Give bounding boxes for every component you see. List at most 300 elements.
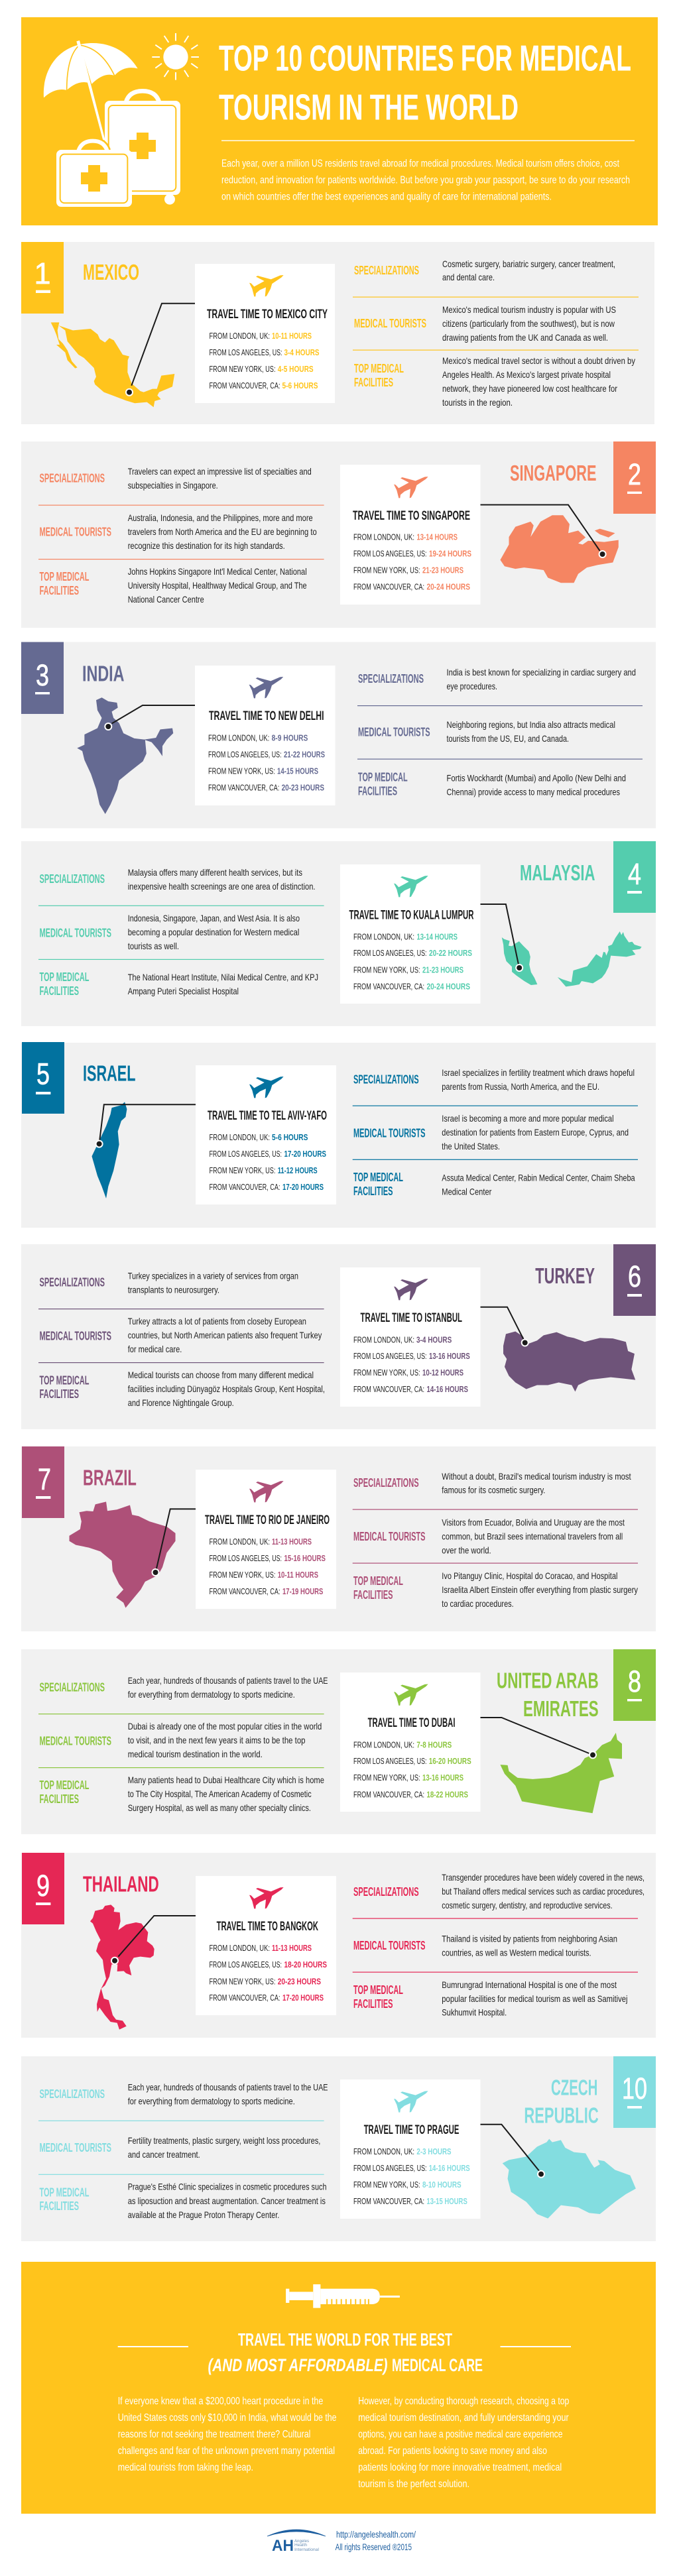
travel times: 13-14 HOURS xyxy=(416,532,458,542)
travel times: 14-15 HOURS xyxy=(277,766,318,776)
number badge 8: 8 xyxy=(628,1665,641,1698)
details text: Medical Center xyxy=(442,1187,492,1197)
travel times: 14-16 HOURS xyxy=(429,2163,470,2173)
country name: EMIRATES xyxy=(523,1696,599,1721)
travel time card xyxy=(196,1470,336,1609)
details text: Each year, hundreds of thousands of patients travel to the UAE xyxy=(128,2082,328,2093)
map: Czech Republic xyxy=(503,2139,636,2219)
row labels xyxy=(38,872,324,998)
details text xyxy=(442,1471,638,1609)
footer text: left column: reasons for not seeking the treatment there? Cultural xyxy=(118,2429,310,2440)
travel times: FROM LONDON, UK: xyxy=(210,1132,270,1142)
travel times: FROM NEW YORK, US: xyxy=(210,364,276,374)
number badge 8 xyxy=(613,1649,656,1721)
row labels: FACILITIES xyxy=(40,1792,79,1806)
travel times: 21-22 HOURS xyxy=(284,749,325,759)
details text: and Florence Nightingale Group. xyxy=(128,1397,234,1408)
connector and city marker xyxy=(95,1104,196,1148)
details text: to The City Hospital, The American Academy of Cosmetic xyxy=(128,1788,312,1799)
panel: 3 India xyxy=(21,642,656,829)
row labels xyxy=(353,264,639,389)
details text xyxy=(442,1067,635,1197)
details text: Without a doubt, Brazil's medical tourism industry is most xyxy=(442,1471,631,1482)
footer text: right column: However, by conducting thorough research, choosing a top xyxy=(358,2396,569,2407)
details text: and dental care. xyxy=(442,272,495,282)
travel times xyxy=(208,732,325,793)
details text: India is best known for specializing in cardiac surgery and xyxy=(447,667,636,677)
details text: drawing patients from the UK and Canada as well. xyxy=(442,332,608,343)
details text: Medical tourists can choose from many different medical xyxy=(128,1370,314,1380)
travel times: 17-20 HOURS xyxy=(284,1149,326,1159)
travel times: 17-20 HOURS xyxy=(282,1993,324,2003)
card title: TRAVEL TIME TO SINGAPORE xyxy=(353,508,470,523)
country name: INDIA xyxy=(82,661,125,685)
travel times: 3-4 HOURS xyxy=(416,1335,452,1344)
icon: plane xyxy=(249,275,284,296)
country name: CZECH xyxy=(551,2076,597,2100)
credits: All rights Reserved ®2015 xyxy=(336,2542,412,2552)
details text: Mexico's medical tourism industry is popular with US xyxy=(442,304,616,315)
travel times: 13-14 HOURS xyxy=(416,931,458,941)
footer text: right column xyxy=(358,2396,569,2490)
travel times: FROM LOS ANGELES, US: xyxy=(353,2163,427,2173)
country name: UNITED ARAB xyxy=(497,1669,599,1693)
connector and city marker xyxy=(104,705,195,731)
details text: recognize this destination for its high standards. xyxy=(128,540,285,551)
icon: plane xyxy=(394,2091,428,2113)
details text: destination for patients from Eastern Europe, Cyprus, and xyxy=(442,1127,629,1138)
panel: 5 Israel xyxy=(21,1042,656,1228)
row labels xyxy=(38,471,324,597)
travel times: FROM LOS ANGELES, US: xyxy=(353,1351,427,1361)
row labels: MEDICAL TOURISTS xyxy=(358,725,430,738)
details text: Turkey specializes in a variety of services from organ xyxy=(128,1270,298,1281)
details text: Visitors from Ecuador, Bolivia and Uruguay are the most xyxy=(442,1517,625,1528)
row labels: SPECIALIZATIONS xyxy=(353,1073,419,1086)
travel times: FROM VANCOUVER, CA: xyxy=(210,1586,280,1596)
row labels: SPECIALIZATIONS xyxy=(353,1476,419,1490)
footer text: left column: challenges and fear of the unknown prevent many potential xyxy=(118,2445,335,2457)
icon: umbrella xyxy=(44,40,138,141)
icon: syringe xyxy=(286,2284,400,2308)
row labels: TOP MEDICAL xyxy=(40,2186,89,2199)
details text: for medical care. xyxy=(128,1344,182,1354)
title xyxy=(219,38,631,127)
travel times: FROM NEW YORK, US: xyxy=(353,2180,420,2190)
travel times: FROM VANCOUVER, CA: xyxy=(208,783,279,793)
travel times: 17-20 HOURS xyxy=(282,1182,324,1192)
map: Malaysia xyxy=(502,931,642,986)
footer text: left column: medical tourists from taking the leap. xyxy=(118,2462,253,2473)
details text: inexpensive health screenings are one area of distinction. xyxy=(128,881,315,892)
panel: 7 Brazil xyxy=(21,1446,656,1631)
travel times: FROM LOS ANGELES, US: xyxy=(210,347,282,357)
row labels xyxy=(353,1476,638,1602)
details text: Dubai is already one of the most popular cities in the world xyxy=(128,1721,322,1731)
map: Brazil xyxy=(70,1501,176,1608)
details text: Malaysia offers many different health services, but its xyxy=(128,867,302,878)
number badge 9: 9 xyxy=(36,1869,50,1903)
footer text: right column: medical tourism destination, and fully understanding your xyxy=(358,2412,569,2424)
map: UAE xyxy=(500,1733,622,1813)
card title: TRAVEL TIME TO NEW DELHI xyxy=(209,709,324,723)
travel times: FROM LOS ANGELES, US: xyxy=(210,1553,282,1563)
country name: REPUBLIC xyxy=(524,2103,599,2128)
country name xyxy=(524,2076,599,2128)
details text xyxy=(128,1675,328,1813)
row labels: FACILITIES xyxy=(358,785,397,798)
travel times xyxy=(210,1132,326,1192)
travel times xyxy=(353,2146,470,2206)
travel times: 8-10 HOURS xyxy=(422,2180,462,2190)
footer text: right column: options, you can have a positive medical care experience xyxy=(358,2429,563,2440)
footer heading: (AND MOST AFFORDABLE) xyxy=(208,2355,387,2375)
details text: Sukhumvit Hospital. xyxy=(442,2007,507,2018)
travel times xyxy=(353,532,471,592)
number badge 2: 2 xyxy=(628,457,641,491)
logo: Angeles Health International: International xyxy=(294,2548,319,2552)
card title: TRAVEL TIME TO MEXICO CITY xyxy=(207,307,328,322)
details text: common, but Brazil sees international travelers from all xyxy=(442,1531,623,1542)
details text: Many patients head to Dubai Healthcare City which is home xyxy=(128,1775,324,1785)
travel times: 10-11 HOURS xyxy=(278,1570,318,1580)
row labels: MEDICAL TOURISTS xyxy=(40,926,111,939)
card title: TRAVEL TIME TO DUBAI xyxy=(368,1716,455,1730)
map: Mexico xyxy=(51,322,174,407)
travel times: FROM VANCOUVER, CA: xyxy=(353,981,424,991)
travel times: 13-16 HOURS xyxy=(422,1773,463,1783)
number badge 10: 10 xyxy=(622,2072,647,2105)
row labels: TOP MEDICAL xyxy=(40,970,89,984)
row labels: MEDICAL TOURISTS xyxy=(353,1530,426,1543)
footer text: left column: United States costs only $10,000 in India, what would be the xyxy=(118,2412,337,2424)
travel times: 21-23 HOURS xyxy=(422,965,463,974)
details text: countries, but North American patients also frequent Turkey xyxy=(128,1330,322,1340)
connector and city marker xyxy=(125,304,195,396)
details text: Neighboring regions, but India also attracts medical xyxy=(447,719,615,730)
travel times: FROM LOS ANGELES, US: xyxy=(210,1960,282,1969)
details text: Bumrungrad International Hospital is one of the most xyxy=(442,1979,617,1990)
number badge 4: 4 xyxy=(628,857,641,891)
travel times: FROM LONDON, UK: xyxy=(210,1537,270,1547)
panel: 8 United Arab Emirates xyxy=(21,1649,656,1834)
details text: Fortis Wockhardt (Mumbai) and Apollo (New Delhi and xyxy=(447,773,626,784)
details text: Mexico's medical travel sector is without a doubt driven by xyxy=(442,355,635,366)
number badge 9 xyxy=(22,1853,64,1924)
travel times xyxy=(210,331,320,390)
logo: Angeles Health International xyxy=(267,2530,326,2555)
connector and city marker xyxy=(111,1916,196,1965)
row labels: TOP MEDICAL xyxy=(40,1374,89,1387)
travel times: 11-13 HOURS xyxy=(272,1537,312,1547)
connector and city marker xyxy=(480,2125,545,2178)
footer heading xyxy=(118,2329,571,2375)
number badge 3: 3 xyxy=(36,658,49,692)
travel times: FROM LONDON, UK: xyxy=(353,532,414,542)
row labels: SPECIALIZATIONS xyxy=(354,264,419,277)
row labels: MEDICAL TOURISTS xyxy=(40,2141,111,2154)
number badge 6: 6 xyxy=(628,1259,641,1293)
travel times: 2-3 HOURS xyxy=(416,2146,452,2156)
details text: National Cancer Centre xyxy=(128,594,204,605)
travel times: 21-23 HOURS xyxy=(422,565,463,575)
travel times: FROM VANCOUVER, CA: xyxy=(210,381,280,390)
row labels: MEDICAL TOURISTS xyxy=(40,1734,111,1747)
details text: Israel specializes in fertility treatment which draws hopeful xyxy=(442,1067,635,1078)
travel times: 20-24 HOURS xyxy=(427,582,470,592)
row labels: FACILITIES xyxy=(40,1387,79,1401)
number badge 1 xyxy=(21,242,64,314)
travel times: FROM NEW YORK, US: xyxy=(210,1570,275,1580)
travel times: 7-8 HOURS xyxy=(416,1739,452,1749)
map: India xyxy=(77,697,173,814)
details text: Israel is becoming a more and more popular medical xyxy=(442,1113,614,1124)
icon: plane xyxy=(249,1887,284,1908)
details text: over the world. xyxy=(442,1545,491,1556)
card title: TRAVEL TIME TO ISTANBUL xyxy=(361,1311,462,1325)
details text: for everything from dermatology to sports medicine. xyxy=(128,1689,295,1700)
travel times xyxy=(353,1335,470,1394)
travel times: 11-12 HOURS xyxy=(278,1165,318,1175)
icon: small suitcase xyxy=(56,141,132,207)
details text: popular facilities for medical tourism as well as Samitivej xyxy=(442,1993,627,2004)
travel times: FROM LONDON, UK: xyxy=(353,1739,414,1749)
number badge 1: 1 xyxy=(34,257,51,290)
details text: citizens (particularly from the southwest), but is now xyxy=(442,318,615,329)
details text: countries, as well as Western medical tourists. xyxy=(442,1948,591,1958)
credits xyxy=(336,2529,416,2552)
travel times: FROM NEW YORK, US: xyxy=(208,766,275,776)
travel times: 4-5 HOURS xyxy=(278,364,314,374)
details text xyxy=(128,1270,325,1408)
row labels: FACILITIES xyxy=(40,584,79,597)
travel times: FROM LOS ANGELES, US: xyxy=(208,749,282,759)
number badge 6 xyxy=(613,1244,656,1316)
details text: to cardiac procedures. xyxy=(442,1598,514,1609)
details text: facilities including Dünyagöz Hospitals Group, Kent Hospital, xyxy=(128,1383,325,1394)
title: TOURISM IN THE WORLD xyxy=(219,86,519,127)
details text: Angeles Health. As Mexico's largest private hospital xyxy=(442,369,611,380)
row labels xyxy=(38,1275,324,1401)
map: Israel xyxy=(92,1102,127,1199)
travel times: 13-16 HOURS xyxy=(429,1351,470,1361)
row labels xyxy=(353,1073,638,1198)
travel times: FROM VANCOUVER, CA: xyxy=(353,2196,424,2206)
travel time card xyxy=(195,264,335,403)
icon: large suitcase xyxy=(105,91,180,205)
row labels: FACILITIES xyxy=(353,1185,393,1198)
details text: tourists from the US, EU, and Canada. xyxy=(447,733,569,744)
travel time card xyxy=(340,465,480,605)
travel times: FROM NEW YORK, US: xyxy=(353,1773,420,1783)
details text: network, they have pioneered low cost healthcare for xyxy=(442,383,617,394)
travel time card xyxy=(340,1267,480,1407)
icon: plane xyxy=(394,1279,428,1300)
row labels: TOP MEDICAL xyxy=(354,362,404,375)
number badge 2 xyxy=(613,441,656,514)
icon: plane xyxy=(394,876,428,897)
travel times xyxy=(353,1739,471,1799)
details text: transplants to neurosurgery. xyxy=(128,1284,219,1295)
travel times xyxy=(210,1943,327,2003)
country name: TURKEY xyxy=(535,1263,595,1288)
country name xyxy=(497,1669,599,1721)
row labels: SPECIALIZATIONS xyxy=(40,471,105,485)
connector and city marker xyxy=(480,1307,529,1347)
travel times: FROM NEW YORK, US: xyxy=(353,965,420,974)
row labels: TOP MEDICAL xyxy=(353,1574,403,1588)
row labels: FACILITIES xyxy=(40,984,79,998)
country name: BRAZIL xyxy=(83,1465,137,1490)
connector and city marker xyxy=(480,904,523,972)
details text: Chennai) provide access to many medical procedures xyxy=(447,787,620,797)
details text: Turkey attracts a lot of patients from closeby European xyxy=(128,1316,306,1326)
icon: plane xyxy=(394,1684,428,1706)
footer text: left column xyxy=(118,2396,337,2473)
details text: Indonesia, Singapore, Japan, and West Asia. It is also xyxy=(128,913,300,923)
travel times: FROM NEW YORK, US: xyxy=(353,565,420,575)
details text: Thailand is visited by patients from neighboring Asian xyxy=(442,1934,617,1944)
logo: Angeles Health International: Health xyxy=(294,2544,307,2547)
travel times: 18-20 HOURS xyxy=(284,1960,327,1969)
row labels: FACILITIES xyxy=(354,376,393,389)
travel time card xyxy=(196,1065,336,1204)
number badge 7: 7 xyxy=(38,1462,51,1496)
details text: and cancer treatment. xyxy=(128,2149,200,2160)
details text: Australia, Indonesia, and the Philippines, more and more xyxy=(128,512,313,523)
travel times: FROM VANCOUVER, CA: xyxy=(353,582,424,592)
number badge 5: 5 xyxy=(36,1057,50,1091)
row labels: SPECIALIZATIONS xyxy=(40,872,105,886)
travel time card xyxy=(340,1672,480,1812)
card title: TRAVEL TIME TO TEL AVIV-YAFO xyxy=(208,1108,327,1123)
country name: THAILAND xyxy=(83,1872,159,1897)
travel times: 14-16 HOURS xyxy=(427,1384,468,1394)
travel times: FROM NEW YORK, US: xyxy=(210,1165,275,1175)
row labels xyxy=(38,2087,324,2213)
travel times: FROM VANCOUVER, CA: xyxy=(353,1384,424,1394)
travel times: 11-13 HOURS xyxy=(272,1943,312,1953)
row labels: TOP MEDICAL xyxy=(353,1983,403,1997)
travel times: FROM LONDON, UK: xyxy=(353,2146,414,2156)
country name: ISRAEL xyxy=(83,1061,135,1086)
panel: 10 Czech Republic xyxy=(21,2056,656,2241)
details text: tourists in the region. xyxy=(442,397,513,408)
details text: for everything from dermatology to sports medicine. xyxy=(128,2096,295,2107)
icon: sun xyxy=(152,33,199,80)
row labels xyxy=(357,672,643,798)
travel times: 20-23 HOURS xyxy=(278,1976,321,1986)
travel times: FROM LONDON, UK: xyxy=(353,1335,414,1344)
travel times: 13-15 HOURS xyxy=(426,2196,467,2206)
intro paragraph: on which countries offer the best experiences and quality of care for international patients. xyxy=(221,192,552,203)
travel time card xyxy=(195,666,336,805)
travel times: 3-4 HOURS xyxy=(284,347,320,357)
details text: becoming a popular destination for Western medical xyxy=(128,927,299,937)
travel times: FROM LOS ANGELES, US: xyxy=(353,948,427,958)
card title: TRAVEL TIME TO BANGKOK xyxy=(217,1919,318,1934)
details text: Cosmetic surgery, bariatric surgery, cancer treatment, xyxy=(442,259,615,269)
country name: MEXICO xyxy=(83,260,139,284)
panel: 1 Mexico xyxy=(21,242,654,424)
details text: tourists as well. xyxy=(128,941,179,951)
card title: TRAVEL TIME TO KUALA LUMPUR xyxy=(349,908,473,923)
details text: travelers from North America and the EU are beginning to xyxy=(128,526,317,537)
travel times: 8-9 HOURS xyxy=(272,732,308,742)
travel times xyxy=(210,1537,326,1596)
travel time card xyxy=(340,864,480,1004)
details text: Johns Hopkins Singapore Int'l Medical Center, National xyxy=(128,566,307,577)
travel times: 19-24 HOURS xyxy=(429,549,471,559)
panel: 4 Malaysia xyxy=(21,841,656,1026)
connector and city marker xyxy=(480,1718,597,1759)
travel times: FROM LOS ANGELES, US: xyxy=(210,1149,282,1159)
map: Thailand xyxy=(90,1904,154,2030)
footer panel: conclusion xyxy=(21,2262,656,2514)
travel times: FROM LONDON, UK: xyxy=(210,331,270,341)
details text: the United States. xyxy=(442,1141,500,1151)
panel: 9 Thailand xyxy=(21,1853,656,2038)
row labels: MEDICAL TOURISTS xyxy=(353,1126,426,1140)
travel times: FROM VANCOUVER, CA: xyxy=(210,1993,280,2003)
card title: TRAVEL TIME TO PRAGUE xyxy=(364,2123,459,2137)
travel times: 17-19 HOURS xyxy=(282,1586,324,1596)
panel: 6 Turkey xyxy=(21,1244,656,1429)
country name: SINGAPORE xyxy=(510,461,597,485)
logo: Angeles Health International: AH xyxy=(272,2537,294,2555)
details text: parents from Russia, North America, and the EU. xyxy=(442,1081,599,1092)
connector and city marker xyxy=(480,505,607,558)
footer text: left column: If everyone knew that a $200,000 heart procedure in the xyxy=(118,2396,323,2407)
row labels: SPECIALIZATIONS xyxy=(358,672,424,685)
footer heading: MEDICAL CARE xyxy=(392,2355,483,2375)
details text: to visit, and in the next few years it aims to be the top xyxy=(128,1735,306,1745)
travel times: FROM LOS ANGELES, US: xyxy=(353,1756,427,1766)
number badge 4 xyxy=(613,841,656,913)
footer heading: TRAVEL THE WORLD FOR THE BEST xyxy=(238,2329,452,2349)
travel times: FROM VANCOUVER, CA: xyxy=(353,1790,424,1799)
travel times: 18-22 HOURS xyxy=(427,1790,468,1799)
travel times: FROM NEW YORK, US: xyxy=(353,1368,420,1377)
row labels: MEDICAL TOURISTS xyxy=(354,317,426,330)
details text: eye procedures. xyxy=(447,681,497,691)
travel times xyxy=(353,931,472,991)
details text: available at the Prague Proton Therapy Center. xyxy=(128,2209,279,2220)
travel times: FROM LOS ANGELES, US: xyxy=(353,549,427,559)
details text xyxy=(128,2082,328,2220)
country name: MALAYSIA xyxy=(520,860,595,885)
details text xyxy=(447,667,636,797)
details text: subspecialties in Singapore. xyxy=(128,480,218,491)
travel times: FROM LONDON, UK: xyxy=(208,732,269,742)
logo: Angeles Health International: Angeles xyxy=(294,2540,309,2544)
details text xyxy=(442,259,635,408)
footer text: right column: patients looking for more innovative treatment, medical xyxy=(358,2462,562,2473)
travel times: 20-22 HOURS xyxy=(429,948,472,958)
row labels: TOP MEDICAL xyxy=(40,570,89,583)
details text: Travelers can expect an impressive list of specialties and xyxy=(128,466,312,477)
travel times: 10-11 HOURS xyxy=(272,331,312,341)
details text: The National Heart Institute, Nilai Medical Centre, and KPJ xyxy=(128,972,318,982)
icon: plane xyxy=(394,477,428,498)
icon: plane xyxy=(249,1077,284,1098)
row labels: FACILITIES xyxy=(353,1588,393,1602)
details text: Fertility treatments, plastic surgery, weight loss procedures, xyxy=(128,2135,320,2146)
row labels: SPECIALIZATIONS xyxy=(40,2087,105,2101)
travel times: FROM LONDON, UK: xyxy=(210,1943,270,1953)
credits: http://angeleshealth.com/ xyxy=(336,2529,416,2540)
number badge 5 xyxy=(22,1042,64,1114)
